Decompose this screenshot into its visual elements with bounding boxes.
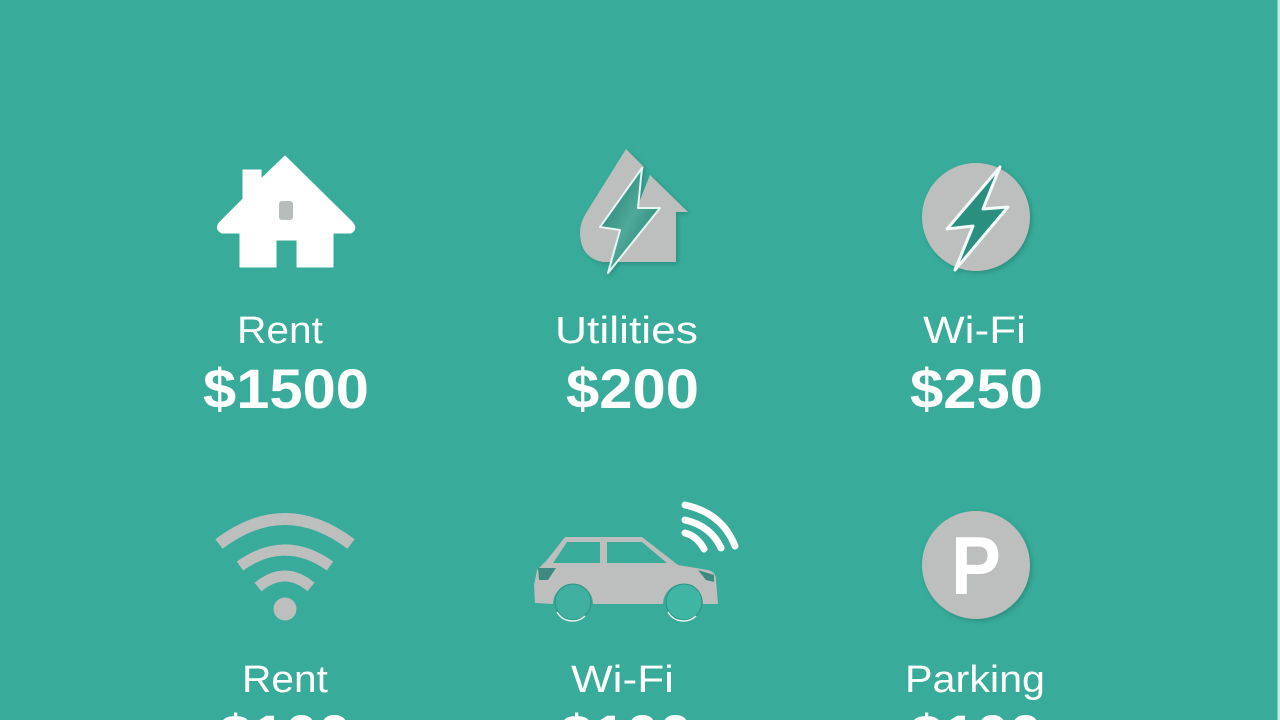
panel: wi-fi bbox=[910, 163, 1043, 420]
panel: rent, second row bbox=[219, 519, 351, 720]
panel: wi-fi, second row bbox=[534, 505, 735, 720]
label: Wi-Fi: Wi-Fi bbox=[923, 310, 1026, 352]
icon: wi-fi signal bbox=[219, 519, 351, 620]
label: Wi-Fi: Wi-Fi bbox=[571, 659, 674, 701]
amount: $1500: $1500 bbox=[203, 357, 369, 420]
label: Rent: Rent bbox=[237, 310, 323, 352]
label: Parking: Parking bbox=[905, 659, 1045, 701]
icon: house bbox=[217, 156, 355, 267]
panel: rent bbox=[203, 156, 369, 420]
icon: drop and house with bolt bbox=[580, 149, 688, 273]
label: Utilities: Utilities bbox=[555, 310, 698, 352]
icon: circle with bolt bbox=[922, 163, 1030, 271]
label: Rent: Rent bbox=[242, 659, 328, 701]
amount: $250: $250 bbox=[910, 357, 1043, 420]
icon: car with signal bbox=[534, 505, 735, 621]
icon: parking circle: P bbox=[951, 519, 1001, 612]
panel: parking bbox=[905, 511, 1045, 720]
amount: $200: $200 bbox=[566, 357, 699, 420]
icon: parking circle bbox=[922, 511, 1030, 619]
panel: utilities bbox=[555, 149, 699, 420]
